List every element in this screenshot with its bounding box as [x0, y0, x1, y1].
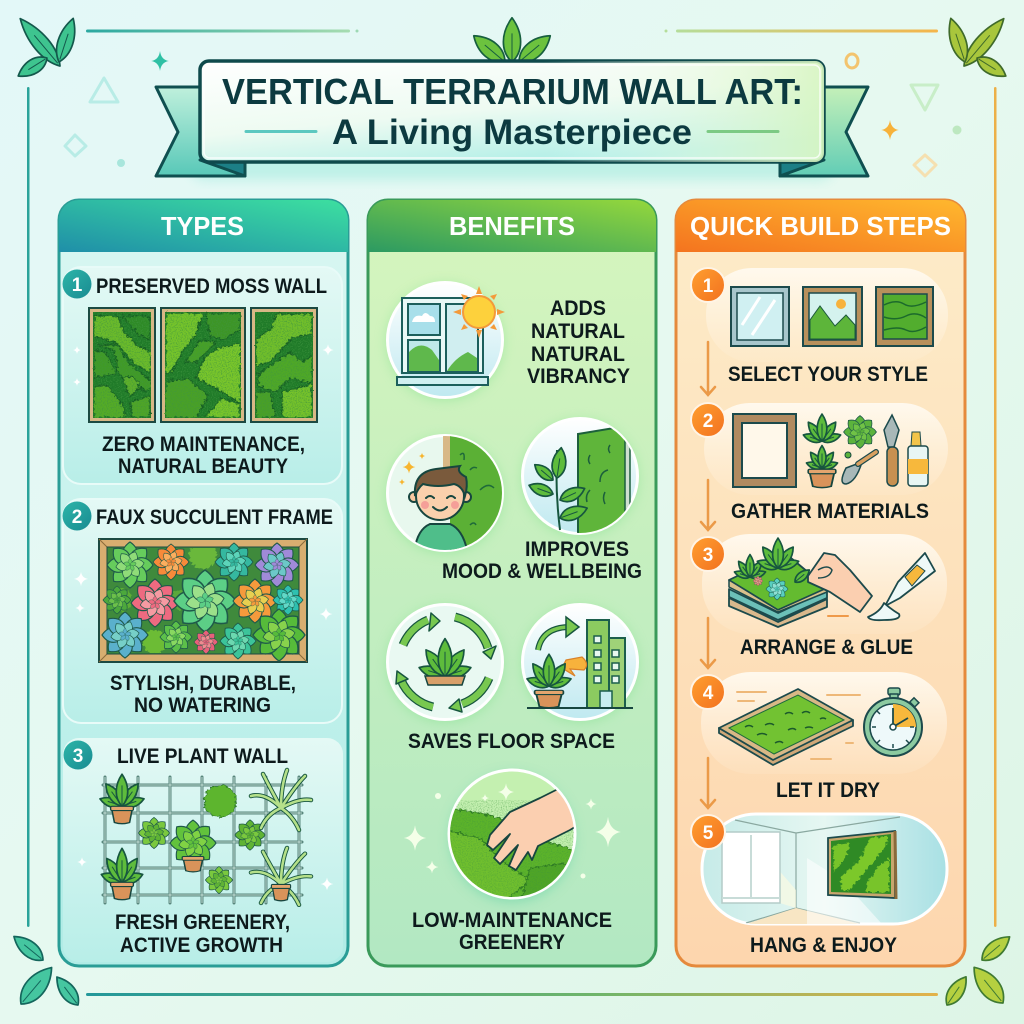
number badge 2	[62, 502, 92, 530]
step 4: let it dry: LET IT DRY	[776, 779, 880, 802]
frame options	[731, 287, 933, 346]
card: faux succulent frame: STYLISH, DURABLE,	[110, 672, 296, 695]
panel: types	[59, 200, 348, 966]
decorative shapes: left	[65, 51, 169, 167]
ribbon tails	[156, 87, 868, 176]
number badge: step 1: 1	[703, 276, 714, 297]
decorative shapes: right	[846, 54, 962, 176]
subtitle side rules	[246, 130, 778, 133]
number badge: step 4	[691, 675, 725, 709]
text: saves floor space: SAVES FLOOR SPACE	[408, 730, 615, 753]
step 5: hang and enjoy: HANG & ENJOY	[750, 934, 897, 957]
sparkles	[77, 857, 333, 890]
text: adds natural vibrancy: ADDS	[550, 297, 606, 320]
step 2: gather materials: GATHER MATERIALS	[731, 500, 929, 523]
card: preserved moss wall: PRESERVED MOSS WALL	[96, 275, 327, 298]
panel: quick build steps	[676, 200, 965, 966]
card: faux succulent frame: NO WATERING	[134, 694, 271, 717]
icon: plant with cycle arrows	[388, 604, 502, 720]
text: adds natural vibrancy: NATURAL	[531, 343, 625, 366]
header: types	[59, 200, 348, 252]
title text: VERTICAL TERRARIUM WALL ART:	[222, 71, 803, 112]
icon: sprout above banner	[468, 18, 556, 68]
step 1: select your style	[691, 268, 948, 386]
card: preserved moss wall: ZERO MAINTENANCE,	[102, 433, 305, 456]
icon: happy person and moss wall	[388, 435, 506, 555]
number badge 2: 2	[72, 507, 82, 528]
subtitle text: A Living Masterpiece	[332, 113, 692, 152]
arrow: step 3 to 4	[701, 618, 715, 668]
text: improves mood and wellbeing: IMPROVES	[525, 538, 629, 561]
number badge 1	[62, 270, 92, 298]
panel: benefits	[368, 200, 656, 966]
text: improves mood and wellbeing	[442, 538, 642, 583]
number badge 3: 3	[73, 746, 83, 767]
text: low maintenance greenery: GREENERY	[459, 931, 565, 954]
number badge: step 3	[691, 537, 725, 571]
header: types: TYPES	[161, 211, 244, 241]
number badge: step 5: 5	[703, 823, 714, 844]
moss frames triptych	[89, 308, 317, 422]
plant trellis illustration	[99, 770, 311, 905]
card: live plant wall: FRESH GREENERY,	[115, 911, 290, 934]
card: live plant wall: ACTIVE GROWTH	[120, 934, 283, 957]
sparkles around hand icon	[404, 783, 621, 878]
sparkles	[73, 344, 334, 386]
corner leaves: top right	[944, 14, 1010, 82]
card: preserved moss wall: NATURAL BEAUTY	[118, 455, 288, 478]
step 3: arrange and glue: ARRANGE & GLUE	[740, 636, 913, 659]
header: quick build steps	[676, 200, 965, 252]
number badge 1: 1	[72, 275, 83, 296]
corner leaves: bottom right	[941, 931, 1014, 1009]
sparkles	[74, 572, 332, 620]
text: adds natural vibrancy: NATURAL	[531, 320, 625, 343]
layers and hand illustration	[729, 538, 935, 627]
arrow: step 4 to 5	[701, 758, 715, 808]
arrow: step 1 to 2	[701, 342, 715, 395]
card: live plant wall	[63, 738, 343, 962]
text: adds natural vibrancy	[527, 297, 630, 388]
card: faux succulent frame	[62, 499, 342, 723]
card: live plant wall: LIVE PLANT WALL	[117, 745, 288, 768]
moss tray	[719, 689, 860, 765]
arrow: step 2 to 3	[701, 480, 715, 530]
text: improves mood and wellbeing: MOOD & WELLBEING	[442, 560, 642, 583]
icon: hand touching moss	[445, 770, 580, 905]
text: low maintenance greenery	[412, 909, 612, 954]
hanging moss frame	[828, 831, 896, 899]
stopwatch	[864, 688, 922, 756]
materials icons	[733, 414, 928, 488]
header: benefits: BENEFITS	[449, 211, 575, 241]
room illustration	[722, 817, 900, 924]
step 3: arrange and glue	[691, 534, 947, 659]
step 4: let it dry	[691, 672, 947, 802]
step 2: gather materials	[691, 403, 948, 523]
title banner	[156, 18, 868, 180]
number badge: step 2	[691, 403, 725, 437]
header: quick build steps: QUICK BUILD STEPS	[690, 211, 951, 241]
corner leaves: top left	[14, 14, 80, 82]
number badge: step 2: 2	[703, 411, 713, 432]
banner glow	[190, 150, 834, 180]
icon: building with potted plant	[522, 604, 638, 720]
card: faux succulent frame: FAUX SUCCULENT FRAME	[96, 506, 333, 529]
corner leaves: bottom left	[9, 931, 84, 1010]
text: low maintenance greenery: LOW-MAINTENANCE	[412, 909, 612, 932]
number badge: step 4: 4	[703, 683, 714, 704]
header: benefits	[368, 200, 656, 252]
number badge 3	[64, 740, 92, 770]
card: preserved moss wall	[62, 267, 342, 484]
number badge: step 1	[691, 268, 725, 302]
icon: window and sun	[388, 282, 505, 398]
succulent frame illustration	[99, 539, 307, 662]
step 1: select your style: SELECT YOUR STYLE	[728, 363, 928, 386]
number badge: step 3: 3	[703, 545, 713, 566]
step 5: hang and enjoy	[691, 814, 947, 957]
icon: plant and moss wall	[522, 418, 638, 540]
glows behind icons	[387, 284, 638, 902]
number badge: step 5	[691, 815, 725, 849]
text: adds natural vibrancy: VIBRANCY	[527, 365, 630, 388]
